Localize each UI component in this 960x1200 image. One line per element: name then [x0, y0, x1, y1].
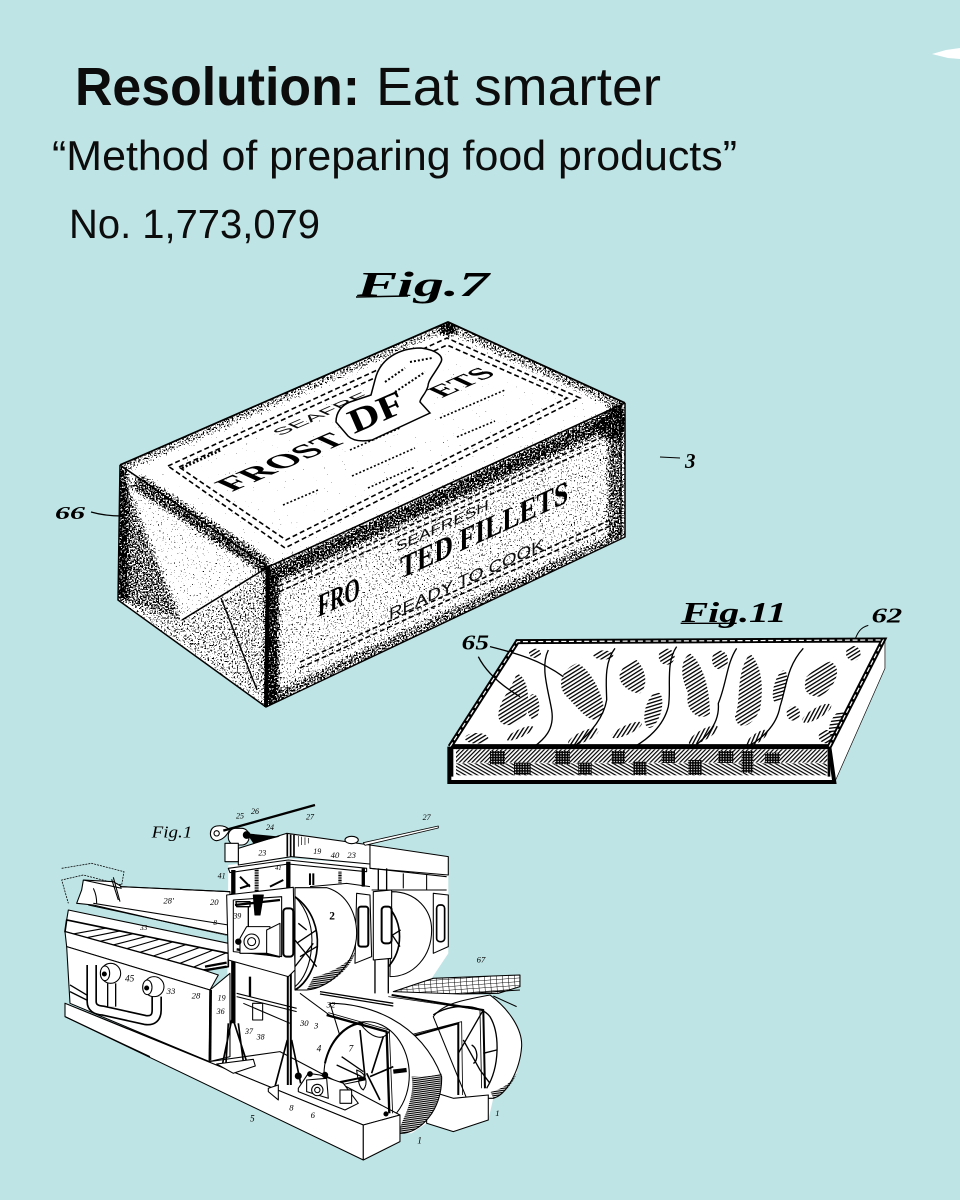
part-number labels: 27: [423, 813, 432, 822]
package white faces: [118, 322, 625, 707]
package outline: [118, 322, 625, 707]
centre plate: [355, 893, 372, 963]
slab side: [829, 640, 885, 782]
part-number labels: 33: [139, 923, 148, 932]
figure 7: frosted fillets package: [55, 265, 696, 707]
slab dashed border: [449, 640, 883, 782]
part-number labels: 20: [210, 897, 219, 907]
outfeed grid conveyor: [393, 975, 520, 1007]
part-number labels: 67: [477, 955, 486, 965]
callout 3: [660, 449, 696, 473]
figure 11 caption: [680, 598, 787, 629]
part-number labels: 4: [317, 1044, 322, 1054]
part-number labels: [125, 807, 500, 1146]
front label text: TED FILLETS: [400, 473, 568, 586]
part-number labels: 30: [299, 1018, 309, 1028]
patent number: No. 1,773,079: [69, 201, 320, 247]
white machine silhouette: [227, 858, 522, 1142]
part-number labels: 39: [232, 912, 241, 921]
package stipple shading: [118, 319, 627, 707]
small label copy marks: [182, 390, 505, 505]
figure 1: processing machine: [62, 805, 522, 1160]
machine housing panel: [67, 947, 230, 1062]
part-number labels: 19: [313, 847, 321, 856]
top crosshead: [228, 833, 370, 873]
part-number labels: 33: [166, 986, 176, 996]
part-number labels: 41: [218, 872, 226, 881]
rear belt frame: [320, 992, 485, 1095]
front label text: [318, 473, 568, 624]
part-number labels: 45: [125, 974, 135, 984]
part-number labels: 38: [256, 1032, 265, 1041]
top label text: FROST: [206, 429, 356, 495]
figure 7 caption: [355, 265, 492, 304]
callout 62: [855, 606, 902, 640]
peeled flap with brand mark: [336, 348, 442, 441]
base slab: [65, 1003, 400, 1160]
slab top with fillets: [450, 640, 883, 750]
part-number labels: 28: [192, 991, 201, 1001]
part-number labels: 19: [218, 994, 226, 1003]
cross section layers: [449, 747, 833, 782]
figure 1 caption: Fig.1: [151, 822, 192, 841]
part-number labels: 41: [275, 865, 282, 872]
heading: resolution: [75, 57, 661, 117]
part-number labels: 5: [250, 1114, 255, 1124]
part-number labels: 7: [349, 1044, 354, 1054]
part-number labels: 8: [213, 918, 217, 927]
front label text: SEAFRESH: [396, 496, 489, 555]
side frame with bearing: [227, 887, 295, 977]
figure 11 caption: Fig.11: [680, 598, 787, 629]
part-number labels: 24: [266, 823, 274, 832]
white paint fleck, top right: [932, 48, 960, 59]
upper drum 2: [295, 888, 357, 990]
part-number labels: 1: [495, 1108, 500, 1118]
part-number labels: 3: [313, 1021, 319, 1031]
part-number labels: 40: [331, 850, 340, 860]
part-number labels: 32: [326, 999, 336, 1009]
rear housing and drum: [370, 845, 448, 993]
callout 65: 65: [462, 633, 489, 655]
peeled flap with brand mark: DF: [342, 384, 410, 441]
rear base block: [427, 1090, 488, 1132]
fillet outlines: [478, 647, 803, 747]
column feet: [217, 893, 301, 1100]
front lower drum: [324, 1003, 442, 1133]
rear lower drum: [433, 995, 522, 1098]
steam pipe and rollers: [92, 963, 164, 1020]
callout 66: [55, 503, 122, 523]
infeed conveyor: [62, 863, 230, 990]
part-number labels: 8: [289, 1103, 294, 1113]
bearing block: [295, 1072, 358, 1110]
callout 3: 3: [684, 449, 696, 473]
top label text: SEAFRE: [268, 391, 375, 438]
front label text: FRO: [318, 569, 360, 624]
figure 11: fillets in package cross section: [449, 598, 902, 782]
part-number labels: 23: [347, 850, 357, 860]
part-number labels: 36: [216, 1007, 225, 1016]
top label text: [206, 364, 503, 495]
figure 7 caption: Fig.7: [355, 265, 492, 304]
part-number labels: 23: [258, 848, 266, 857]
top label text: ETS: [420, 364, 503, 401]
callout 66: 66: [55, 503, 85, 523]
part-number labels: 25: [236, 812, 244, 821]
part-number labels: 37: [244, 1027, 254, 1036]
front label text: READY TO COOK: [389, 536, 544, 624]
callout 62: 62: [872, 606, 902, 628]
heading: resolution: Eat smarter: [376, 57, 661, 117]
part-number labels: 6: [311, 1110, 316, 1120]
fillet shading: [465, 646, 861, 750]
part-number labels: 26: [251, 807, 259, 816]
part-number labels: 2: [329, 910, 335, 922]
dashed label borders: [168, 338, 612, 668]
columns and struts: [233, 862, 370, 897]
heading: resolution: Resolution:: [75, 57, 360, 117]
patent title: “Method of preparing food products”: [52, 132, 737, 179]
part-number labels: 1: [417, 1136, 422, 1146]
belt run with rails: [300, 993, 393, 1116]
lever arms: [210, 805, 438, 862]
part-number labels: 28': [163, 895, 174, 905]
part-number labels: 27: [306, 812, 315, 821]
